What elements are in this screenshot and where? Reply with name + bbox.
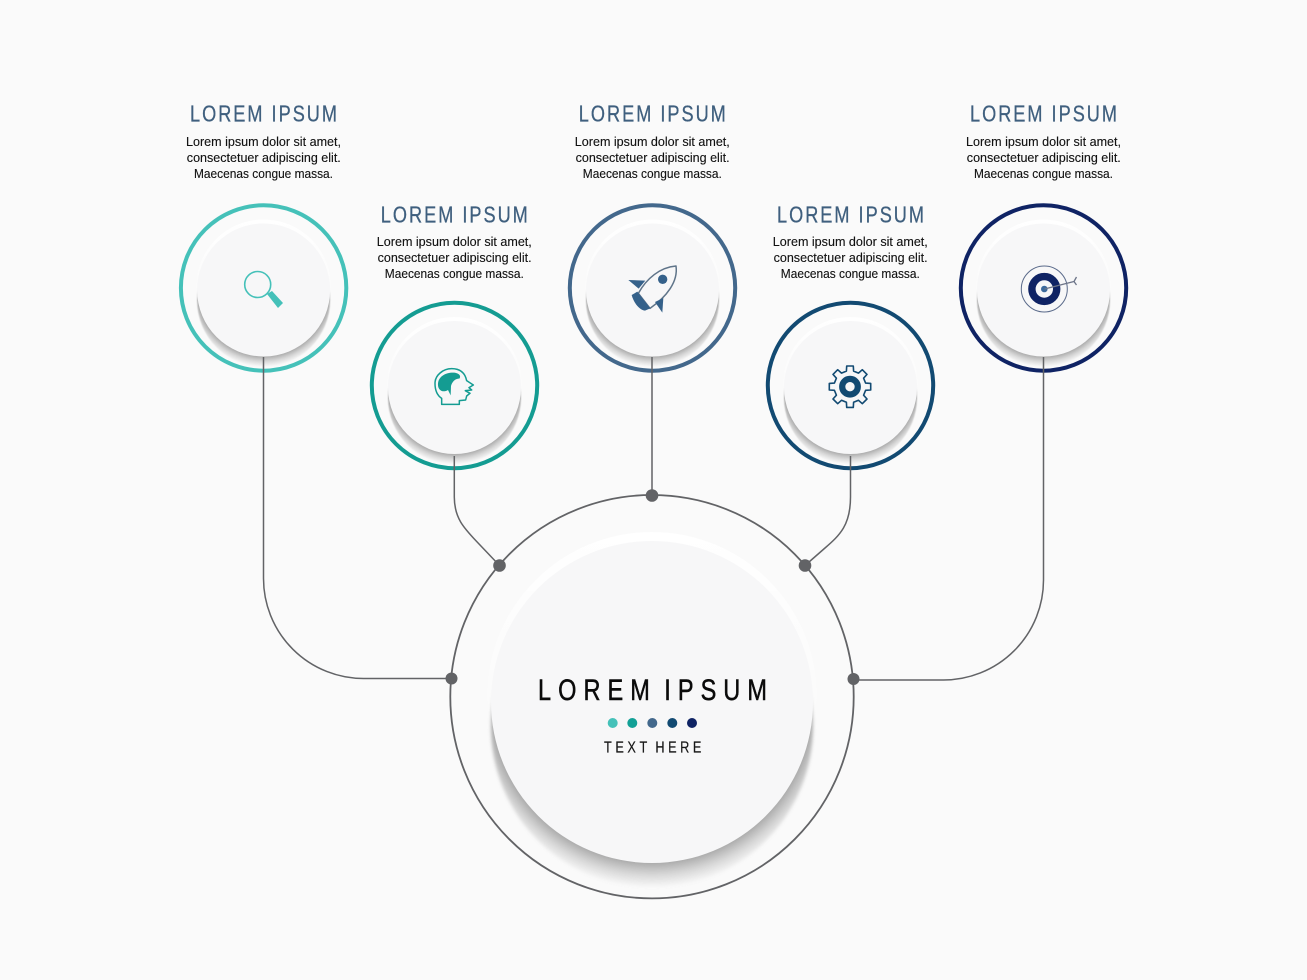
step 3 ring	[570, 205, 735, 371]
step 5 ring	[961, 205, 1126, 371]
step 2 description: consectetuer adipiscing elit.	[378, 250, 532, 265]
step 5 description: Maecenas congue massa.	[974, 166, 1113, 181]
connector: step 4 to hub	[805, 456, 850, 566]
step 3 description: consectetuer adipiscing elit.	[576, 150, 730, 165]
step 3 description: Maecenas congue massa.	[583, 166, 722, 181]
step 5 description	[966, 134, 1121, 181]
step 5 shadow	[977, 234, 1110, 367]
step 1 ring	[181, 205, 346, 371]
step 1 shadow	[197, 234, 330, 367]
panel: step 2	[372, 202, 537, 468]
step 3 description: Lorem ipsum dolor sit amet,	[575, 134, 730, 149]
step 4 shadow	[784, 331, 917, 464]
step 5 description: consectetuer adipiscing elit.	[967, 150, 1121, 165]
step 1 description: Lorem ipsum dolor sit amet,	[186, 134, 341, 149]
step 2 description: Maecenas congue massa.	[385, 266, 524, 281]
step 4 ring	[768, 303, 933, 468]
step 4 disc	[784, 321, 917, 454]
step 4 highlight	[783, 317, 918, 452]
central hub outer ring	[450, 495, 854, 898]
step 2 shadow	[388, 331, 521, 464]
step 1 description	[186, 134, 341, 181]
step 1 description: consectetuer adipiscing elit.	[187, 150, 341, 165]
step 3 heading: LOREM IPSUM	[579, 100, 728, 126]
step 3 description	[575, 134, 730, 181]
step 1 highlight	[196, 220, 331, 354]
step 4 description	[773, 234, 928, 281]
panel: step 3	[570, 100, 735, 371]
icon: magnifying glass	[245, 272, 283, 308]
step 3 disc	[586, 224, 719, 356]
step 2 ring	[372, 303, 537, 468]
connector nodes	[446, 489, 860, 685]
step 3 highlight	[585, 220, 720, 354]
panel: step 5	[961, 100, 1126, 371]
icon: head with brain	[435, 369, 473, 404]
hub disc	[491, 541, 813, 863]
step 5 heading: LOREM IPSUM	[970, 100, 1119, 126]
step 4 description: Maecenas congue massa.	[781, 266, 920, 281]
connector: step 5 to hub	[854, 357, 1044, 680]
step 2 disc	[388, 321, 521, 454]
connector: step 3 to hub	[651, 357, 653, 496]
step 3 shadow	[586, 234, 719, 367]
step 1 disc	[197, 224, 330, 356]
panel: step 1	[181, 100, 346, 371]
icon: target with arrow	[1021, 266, 1076, 312]
step 2 description: Lorem ipsum dolor sit amet,	[377, 234, 532, 249]
colour key dots	[608, 718, 697, 728]
step 2 heading: LOREM IPSUM	[381, 202, 530, 228]
step 4 description: consectetuer adipiscing elit.	[774, 250, 928, 265]
hub title: LOREM IPSUM	[538, 674, 774, 707]
step 1 heading: LOREM IPSUM	[190, 100, 339, 126]
step 5 description: Lorem ipsum dolor sit amet,	[966, 134, 1121, 149]
step 4 heading: LOREM IPSUM	[777, 202, 926, 228]
step 2 description	[377, 234, 532, 281]
icon: gear	[829, 366, 871, 407]
hub subtitle: TEXT HERE	[604, 740, 705, 756]
hub shadow	[491, 566, 813, 888]
step 5 disc	[977, 224, 1110, 356]
panel: central hub	[487, 532, 817, 888]
hub highlight	[487, 532, 817, 862]
step 1 description: Maecenas congue massa.	[194, 166, 333, 181]
step 2 highlight	[387, 317, 522, 452]
connector: step 1 to hub	[264, 357, 452, 678]
connector: step 2 to hub	[454, 456, 500, 566]
panel: step 4	[768, 202, 933, 468]
step 5 highlight	[976, 220, 1111, 354]
icon: rocket	[628, 266, 676, 313]
step 4 description: Lorem ipsum dolor sit amet,	[773, 234, 928, 249]
